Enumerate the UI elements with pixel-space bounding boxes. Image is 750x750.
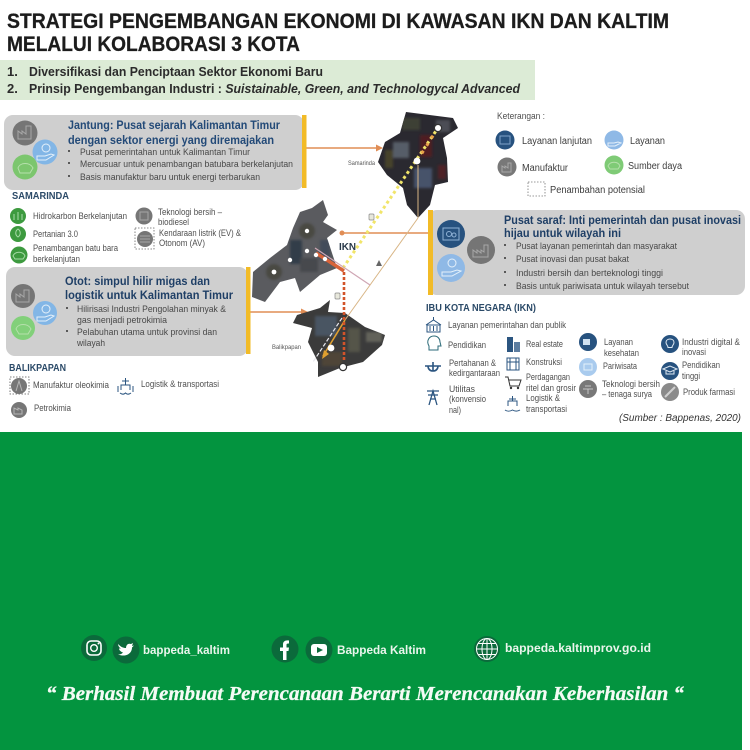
- list: IKN sectors, column 1: Pertahanan &: [449, 358, 496, 368]
- legend: Penambahan potensial: [550, 185, 645, 196]
- heading: dengan sektor energi yang diremajakan: [68, 133, 274, 147]
- heading: [504, 213, 741, 240]
- title: [7, 9, 669, 56]
- map: Samarinda: [348, 112, 458, 218]
- map: IKN: [252, 200, 356, 302]
- list: Balikpapan sectors: [10, 377, 219, 418]
- list: Samarinda sectors: berkelanjutan: [33, 254, 80, 264]
- list: IKN sectors, column 2: transportasi: [526, 404, 567, 414]
- bullet list: Pusat inovasi dan pusat bakat: [516, 254, 629, 265]
- heading: Jantung: Pusat sejarah Kalimantan Timur: [68, 118, 280, 132]
- map nodes and airports: [272, 124, 442, 371]
- icon: resources: [11, 316, 35, 340]
- legend: Layanan: [630, 136, 665, 147]
- icon: YouTube: [306, 636, 332, 664]
- icon: Twitter: [112, 636, 140, 664]
- connector: Otot to Balikpapan: [250, 308, 308, 316]
- map: Samarinda: Samarinda: [348, 161, 376, 167]
- principles band: Diversifikasi dan Penciptaan Sektor Ekonomi Baru: [29, 64, 323, 79]
- icon: globe: [474, 636, 500, 662]
- list: IKN sectors, column 1: (konvensio: [449, 394, 486, 404]
- panel: Otot (Balikpapan): [6, 267, 250, 356]
- list: IKN sectors, column 2: [505, 337, 576, 414]
- legend: Layanan lanjutan: [522, 136, 592, 147]
- list: IKN sectors, column 4: inovasi: [682, 347, 706, 357]
- motto: “ Berhasil Membuat Perencanaan Berarti Merencanakan Keberhasilan “: [46, 683, 684, 705]
- principles band: 2.: [7, 81, 18, 96]
- list: IKN sectors, column 2: Konstruksi: [526, 357, 562, 367]
- list: IKN sectors, column 4: Industri digital &: [682, 337, 740, 347]
- heading: [65, 274, 233, 302]
- heading: Samarinda: SAMARINDA: [12, 190, 69, 202]
- list: IKN sectors, column 3: Teknologi bersih: [602, 379, 660, 389]
- legend: [496, 111, 682, 196]
- list: IKN sectors, column 1: nal): [449, 405, 461, 415]
- title: MELALUI KOLABORASI 3 KOTA: [7, 32, 300, 56]
- bullet list: Pusat layanan pemerintah dan masyarakat: [516, 241, 677, 252]
- list: IKN sectors, column 1: kedirgantaraan: [449, 368, 500, 378]
- heading: IKN: IBU KOTA NEGARA (IKN): [426, 302, 536, 314]
- bullet list: Basis manufaktur baru untuk energi terbarukan: [80, 172, 260, 183]
- bullet list: Basis untuk pariwisata untuk wilayah tersebut: [516, 281, 689, 292]
- principles band: 1.: [7, 64, 18, 79]
- list: IKN sectors, column 2: Logistik &: [526, 393, 560, 403]
- list: IKN sectors, column 3: kesehatan: [604, 348, 639, 358]
- map: IKN: IKN: [339, 241, 356, 253]
- list: Samarinda sectors: Penambangan batu bara: [33, 243, 118, 253]
- bullet list: Mercusuar untuk penambangan batubara berkelanjutan: [80, 159, 293, 170]
- bullet list: Pelabuhan utama untuk provinsi dan: [77, 327, 217, 338]
- connector: Jantung to Samarinda: [306, 144, 383, 152]
- map: Balikpapan: [272, 300, 385, 377]
- legend: Manufaktur: [522, 163, 569, 174]
- panel: Jantung (Samarinda): [4, 115, 306, 190]
- legend: Sumber daya: [628, 161, 682, 172]
- icon: advanced services: [437, 220, 465, 248]
- icon: manufacturing: [11, 284, 35, 308]
- bullet list: Hilirisasi Industri Pengolahan minyak &: [77, 304, 227, 315]
- bullet list: Pusat pemerintahan untuk Kalimantan Timur: [80, 147, 250, 158]
- heading: Otot: simpul hilir migas dan: [65, 274, 210, 288]
- heading: logistik untuk Kalimantan Timur: [65, 288, 233, 302]
- list: Samarinda sectors: Teknologi bersih –: [158, 207, 222, 217]
- legend: Keterangan :: [497, 111, 545, 121]
- list: Balikpapan sectors: Manufaktur oleokimia: [33, 380, 109, 390]
- list: IKN sectors, column 4: Produk farmasi: [683, 387, 735, 397]
- list: IKN sectors, column 1: Layanan pemerintahan dan publik: [448, 320, 566, 330]
- heading: Balikpapan: BALIKPAPAN: [9, 362, 66, 374]
- bullet list: [66, 304, 227, 349]
- icon: resources: [12, 154, 38, 180]
- heading: hijau untuk wilayah ini: [504, 226, 621, 240]
- icon: Facebook: [272, 636, 298, 662]
- bullet list: gas menjadi petrokimia: [77, 315, 168, 326]
- list: IKN sectors, column 2: Real estate: [526, 339, 563, 349]
- list: IKN sectors, column 3: [579, 333, 660, 399]
- bullet list: [68, 147, 293, 183]
- list: IKN sectors, column 4: tinggi: [682, 371, 700, 381]
- icon: manufacturing: [12, 120, 38, 146]
- list: IKN sectors, column 3: Pariwisata: [603, 361, 637, 371]
- list: Samarinda sectors: Otonom (AV): [159, 238, 205, 248]
- principles band: Prinsip Pengembangan Industri : Suistainable, Green, and Technologycal Advanced: [29, 81, 521, 96]
- icon: Instagram: [81, 635, 107, 661]
- list: Balikpapan sectors: Logistik & transportasi: [141, 379, 219, 389]
- footer label: YouTube and Facebook name: Bappeda Kaltim: [337, 643, 426, 657]
- list: IKN sectors, column 2: ritel dan grosir: [526, 383, 576, 393]
- footer label: website: bappeda.kaltimprov.go.id: [505, 641, 651, 655]
- route lines between cities: [313, 125, 440, 362]
- list: IKN sectors, column 3: Layanan: [604, 337, 633, 347]
- list: IKN sectors, column 1: Utilitas: [449, 384, 475, 394]
- icon: services: [32, 140, 58, 164]
- list: Samarinda sectors: [10, 207, 241, 264]
- list: IKN sectors, column 4: [661, 335, 740, 401]
- list: IKN sectors, column 2: Perdagangan: [526, 372, 570, 382]
- list: Samarinda sectors: Hidrokarbon Berkelanjutan: [33, 211, 127, 221]
- icon: services: [437, 254, 465, 282]
- heading: [68, 118, 280, 147]
- title: STRATEGI PENGEMBANGAN EKONOMI DI KAWASAN IKN DAN KALTIM: [7, 9, 669, 33]
- bullet list: wilayah: [76, 338, 105, 349]
- icon: manufacturing: [467, 236, 495, 264]
- list: IKN sectors, column 1: [425, 317, 566, 415]
- principles band: [0, 60, 535, 100]
- list: IKN sectors, column 4: Pendidikan: [682, 360, 720, 370]
- bullet list: Industri bersih dan berteknologi tinggi: [516, 268, 663, 279]
- icon: services: [33, 301, 57, 325]
- source note: (Sumber : Bappenas, 2020): [619, 413, 741, 424]
- connector: Pusat saraf to IKN: [340, 230, 428, 236]
- bullet list: [504, 241, 689, 292]
- panel: green footer: [0, 432, 742, 750]
- map: Balikpapan: Balikpapan: [272, 345, 301, 351]
- list: IKN sectors, column 3: – tenaga surya: [602, 389, 652, 399]
- panel: Pusat saraf (IKN): [428, 210, 745, 295]
- footer label: Twitter handle: bappeda_kaltim: [143, 643, 230, 657]
- list: Samarinda sectors: Kendaraan listrik (EV) &: [159, 228, 241, 238]
- list: IKN sectors, column 1: Pendidikan: [448, 340, 486, 350]
- list: Samarinda sectors: biodiesel: [158, 217, 189, 227]
- list: Balikpapan sectors: Petrokimia: [34, 403, 71, 413]
- list: Samarinda sectors: Pertanian 3.0: [33, 229, 78, 239]
